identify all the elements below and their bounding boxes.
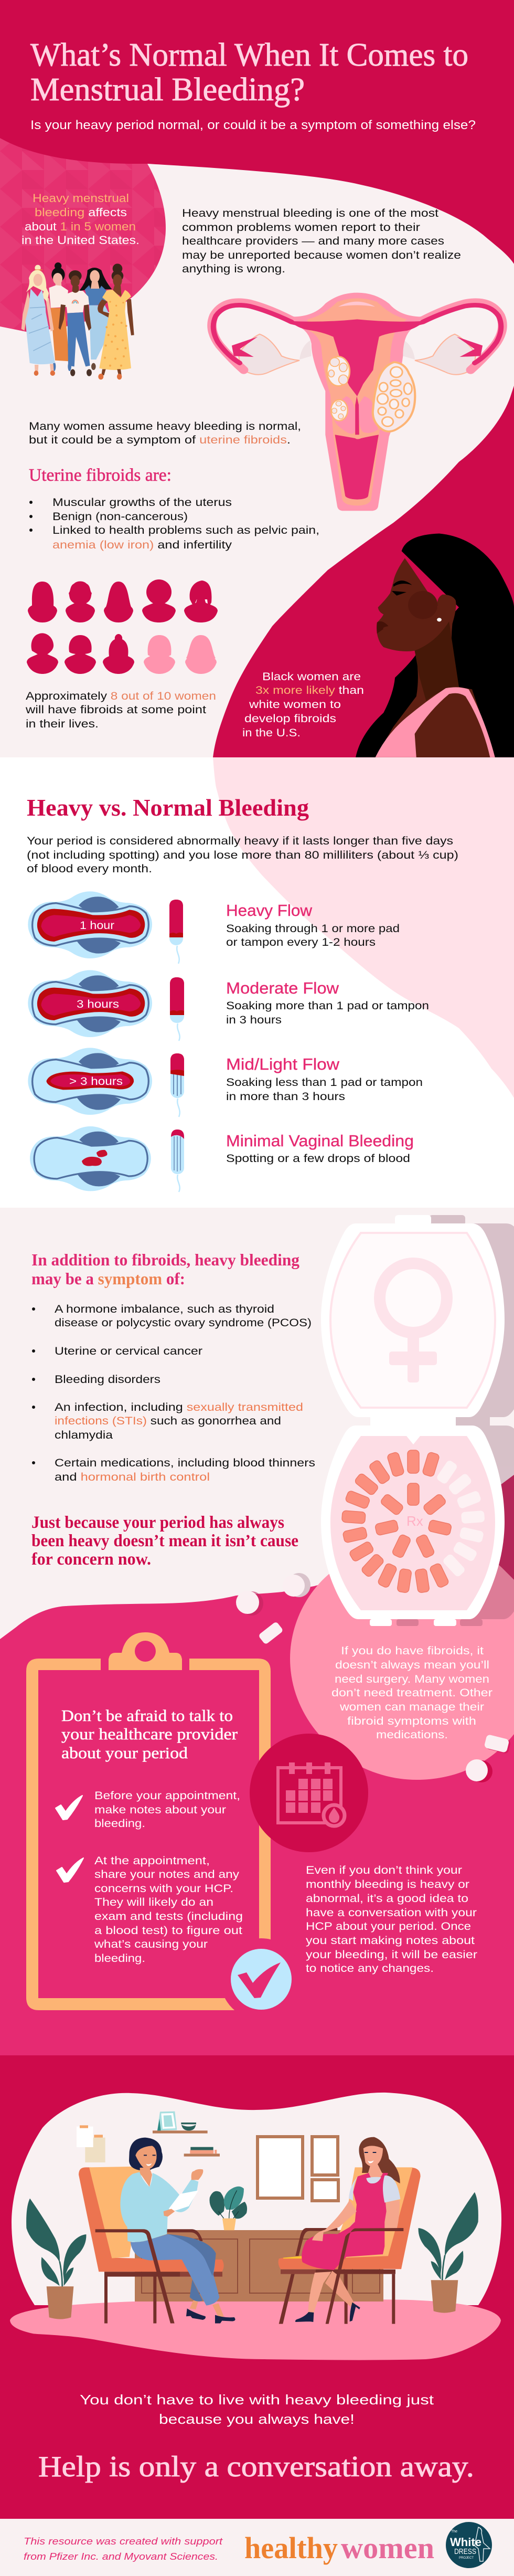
text block: heavy bleeding may be fibroids: Many women assume heavy bleeding is normal,	[29, 420, 301, 432]
flow text: moderate flow: in 3 hours	[226, 1014, 282, 1026]
flow text: moderate flow	[226, 979, 429, 1026]
text block: heavy bleeding is common	[182, 207, 461, 275]
text: you don't have to live with heavy bleeding	[80, 2392, 434, 2427]
woman with black bun behind	[49, 262, 71, 371]
illustration: Black woman in profile	[356, 534, 514, 757]
heading: talk to your provider: Don’t be afraid to talk to	[61, 1706, 233, 1725]
blonde woman in blue dress	[22, 265, 55, 376]
inner ring orange pills	[374, 1483, 452, 1559]
logo: The White Dress Project: The	[451, 2530, 457, 2533]
text block: heavy bleeding may be fibroids	[29, 420, 301, 446]
small potted plant	[209, 2187, 247, 2230]
logo: healthywomen	[244, 2531, 434, 2565]
fallopian tubes	[212, 302, 502, 370]
case shadow	[355, 1215, 514, 1626]
text: fibroids do not always mean surgery: don’t need treatment. Other	[331, 1687, 492, 1699]
flow text: minimal vaginal bleeding	[226, 1132, 414, 1165]
title: Menstrual Bleeding?	[30, 72, 305, 108]
label: more than 3 hours: > 3 hours	[69, 1075, 123, 1088]
silhouette 10	[185, 635, 217, 674]
list: uterine fibroid facts: anemia (low iron) and infertility	[52, 539, 232, 551]
silhouette 9	[144, 635, 175, 674]
icon: blue check badge	[220, 1938, 302, 2020]
panel: clipboard	[26, 1632, 271, 2010]
silhouette 1	[28, 582, 57, 622]
closing headline: Help is only a conversation away.	[38, 2451, 474, 2483]
text: fibroids do not always mean surgery: medications.	[376, 1729, 448, 1741]
ovaries	[239, 334, 476, 375]
flow text: mid light flow: Mid/Light Flow	[226, 1055, 340, 1073]
logo: healthywomen: women	[341, 2531, 434, 2565]
list item: at the appointment: what’s causing your	[94, 1938, 208, 1950]
silhouette 2	[66, 582, 95, 622]
list: other causes of heavy bleeding: and hormonal birth control	[55, 1471, 210, 1483]
list item: at the appointment: bleeding.	[94, 1952, 145, 1965]
list: other causes of heavy bleeding: disease or polycystic ovary syndrome (PCOS)	[55, 1317, 312, 1329]
text: conversation with your HCP: monthly bleeding is heavy or	[306, 1878, 469, 1891]
flow text: moderate flow: Moderate Flow	[226, 979, 339, 997]
text block: heavy bleeding is common: Heavy menstrual bleeding is one of the most	[182, 207, 438, 219]
section: talk to provider background	[0, 1475, 514, 2055]
stat text: 3x more likely: develop fibroids	[244, 713, 336, 725]
text block: heavy period definition: of blood every month.	[27, 863, 152, 875]
list: other causes of heavy bleeding: An infection, including sexually transmitted	[55, 1401, 303, 1413]
callout: always been heavy: been heavy doesn’t mean it isn’t cause	[31, 1532, 298, 1550]
right plant	[419, 2192, 478, 2313]
heading: heavy vs normal bleeding: Heavy vs. Normal Bleeding	[27, 794, 309, 821]
list item: before appointment: bleeding.	[94, 1818, 145, 1830]
title	[30, 37, 468, 108]
text: conversation with your HCP: have a conversation with your	[306, 1907, 477, 1919]
text block: heavy period definition: (not including spotting) and you lose more than 80 milliliters (about ⅓ cup)	[27, 849, 458, 861]
footer: sponsor note: from Pfizer Inc. and Myovant Sciences.	[24, 2551, 218, 2562]
list item: at the appointment: share your notes and any	[94, 1868, 240, 1881]
left plant	[26, 2199, 86, 2319]
text: fibroids do not always mean surgery: need surgery. Many women	[335, 1673, 489, 1685]
uterine cavity	[290, 319, 425, 396]
stat text: 3x more likely: 3x more likely than	[255, 684, 364, 696]
upper shelf	[153, 2112, 208, 2134]
icon: scattered pills left	[236, 1573, 310, 1645]
text block: heavy bleeding is common: healthcare providers — and many more cases	[182, 235, 444, 247]
wall frames	[258, 2137, 338, 2201]
text: fibroids do not always mean surgery: doesn’t always mean you’ll	[335, 1659, 489, 1671]
stat text: 1 in 5 women: Heavy menstrual	[33, 192, 129, 205]
logo: The White Dress Project: DRESS	[454, 2547, 476, 2556]
list: uterine fibroid facts: Linked to health problems such as pelvic pain,	[52, 524, 319, 536]
uterus body	[290, 293, 425, 511]
list item: before appointment: Before your appointment,	[94, 1790, 240, 1802]
patient	[295, 2137, 400, 2322]
flow text: heavy flow	[226, 901, 400, 948]
flow text: mid light flow	[226, 1055, 423, 1103]
list: other causes of heavy bleeding: Bleeding disorders	[55, 1374, 160, 1386]
list: other causes of heavy bleeding: A hormone imbalance, such as thyroid	[55, 1303, 274, 1315]
footer: sponsor note	[24, 2536, 223, 2562]
silhouette 5	[184, 580, 218, 622]
silhouette 3	[104, 582, 133, 622]
woman in yellow dress	[98, 263, 134, 379]
heading: other symptoms	[31, 1250, 299, 1288]
silhouette 7	[65, 635, 96, 674]
chair left	[79, 2167, 224, 2324]
cabinet	[135, 2230, 383, 2301]
logo: The White Dress Project	[446, 2522, 492, 2568]
stat text: 1 in 5 women	[22, 192, 140, 247]
flow text: mid light flow: Soaking less than 1 pad or tampon	[226, 1076, 423, 1089]
callout: always been heavy	[31, 1513, 298, 1569]
label: 1 hour: 1 hour	[80, 920, 114, 932]
list item: at the appointment: They will likely do an	[94, 1896, 213, 1908]
doctor	[120, 2138, 235, 2324]
list item: before appointment	[94, 1790, 240, 1830]
heading: talk to your provider: your healthcare provider	[61, 1725, 238, 1743]
stat text: 1 in 5 women: bleeding affects	[35, 206, 127, 219]
tampon: moderate flow	[170, 977, 184, 1041]
flow text: heavy flow: Heavy Flow	[226, 901, 313, 920]
footer: sponsor note: This resource was created with support	[24, 2536, 223, 2547]
list: uterine fibroid facts	[29, 497, 319, 551]
stat text: 3x more likely: Black women are	[262, 671, 361, 683]
text: conversation with your HCP: HCP about your period. Once	[306, 1920, 471, 1933]
stat text: 8 out of 10 women: Approximately 8 out of 10 women	[26, 690, 216, 702]
text block: heavy bleeding is common: common problems women report to their	[182, 221, 420, 234]
text: fibroids do not always mean surgery	[331, 1645, 492, 1741]
flow text: moderate flow: Soaking more than 1 pad or tampon	[226, 1000, 429, 1012]
logo: The White Dress Project: White	[450, 2536, 481, 2549]
list: other causes of heavy bleeding: chlamydia	[55, 1429, 113, 1441]
illustration: birth control pill case	[321, 1215, 514, 1626]
heading: uterine fibroids are: Uterine fibroids are:	[29, 466, 172, 485]
text: you don't have to live with heavy bleeding: You don’t have to live with heavy bleeding just	[80, 2392, 434, 2408]
list item: before appointment: make notes about your	[94, 1804, 226, 1816]
stat text: 8 out of 10 women: in their lives.	[26, 718, 99, 730]
vaginal canal	[335, 435, 379, 500]
logo: The White Dress Project: PROJECT	[459, 2557, 474, 2560]
case shell	[321, 1215, 505, 1626]
icon: calendar with blood drop	[250, 1734, 368, 1852]
illustration: doctor conversation scene	[10, 2093, 501, 2360]
list item: at the appointment: a blood test) to figure out	[94, 1925, 242, 1937]
stat text: 3x more likely: white women to	[249, 699, 341, 711]
flow text: minimal vaginal bleeding: Minimal Vaginal Bleeding	[226, 1132, 414, 1150]
lower shelf	[184, 2147, 220, 2157]
flow text: heavy flow: Soaking through 1 or more pad	[226, 923, 400, 935]
list: uterine fibroid facts: Benign (non-cancerous)	[52, 511, 188, 523]
text block: heavy period definition: Your period is considered abnormally heavy if it lasts longer than five days	[27, 835, 453, 847]
fibroid large	[373, 362, 415, 431]
callout: always been heavy: Just because your period has always	[31, 1513, 284, 1532]
list: other causes of heavy bleeding: Certain medications, including blood thinners	[55, 1457, 315, 1469]
stat text: 1 in 5 women: in the United States.	[22, 234, 140, 247]
silhouette 6	[27, 633, 58, 674]
pad: minimal bleeding	[30, 1126, 151, 1191]
notes on wall	[77, 2125, 105, 2162]
callout: always been heavy: for concern now.	[31, 1550, 151, 1569]
pad: heavy flow	[28, 891, 152, 958]
title: What’s Normal When It Comes to	[30, 37, 468, 73]
section: heavy vs normal background	[0, 757, 514, 1208]
heading: talk to your provider	[61, 1706, 238, 1762]
flow text: minimal vaginal bleeding: Spotting or a few drops of blood	[226, 1153, 410, 1165]
icon: scattered pills right	[466, 1734, 511, 1782]
left half of scene: notes, shelves, plant, chair, doctor	[77, 2112, 247, 2324]
stat text: 3x more likely	[242, 671, 364, 739]
cervix lobes	[334, 396, 355, 434]
text block: heavy period definition	[27, 835, 458, 875]
stat text: 1 in 5 women: about 1 in 5 women	[25, 220, 136, 233]
text block: heavy bleeding is common: may be unreported because women don’t realize	[182, 249, 461, 261]
list item: at the appointment	[94, 1855, 243, 1965]
pad: moderate flow	[28, 970, 152, 1037]
text: conversation with your HCP: abnormal, it’s a good idea to	[306, 1893, 468, 1905]
tampon: minimal bleeding	[171, 1129, 184, 1192]
icon: check mark 1	[56, 1796, 82, 1820]
panel: 1 in 5 women blob	[0, 138, 166, 332]
chair left front frame	[95, 2229, 175, 2324]
floor	[10, 2299, 501, 2360]
text: conversation with your HCP	[306, 1864, 477, 1975]
tampon: heavy flow	[169, 900, 183, 964]
label: 3 hours: 3 hours	[77, 998, 119, 1010]
chair right front frame	[326, 2228, 403, 2324]
right half of scene: chair and patient	[279, 2137, 421, 2324]
flow text: mid light flow: in more than 3 hours	[226, 1091, 345, 1103]
section: intro background	[0, 0, 514, 757]
heading: talk to your provider: about your period	[61, 1744, 188, 1762]
stat text: 8 out of 10 women	[25, 690, 216, 730]
text: conversation with your HCP: Even if you don’t think your	[306, 1864, 462, 1876]
text: conversation with your HCP: you start making notes about	[306, 1935, 475, 1947]
text: conversation with your HCP: to notice any changes.	[306, 1962, 434, 1975]
outer ring orange pills	[342, 1450, 449, 1593]
lid with female symbol	[330, 1233, 495, 1408]
text block: heavy bleeding is common: anything is wrong.	[182, 263, 285, 275]
text: fibroids do not always mean surgery: If you do have fibroids, it	[341, 1645, 484, 1657]
woman with long black hair behind	[79, 268, 112, 370]
text: you don't have to live with heavy bleeding: because you always have!	[159, 2411, 355, 2427]
icon: check mark 2	[57, 1858, 83, 1882]
woman with rainbow tee	[59, 270, 92, 376]
fibroid small	[331, 400, 348, 421]
list: other causes of heavy bleeding: Uterine or cervical cancer	[55, 1345, 202, 1357]
heading: other symptoms: may be a symptom of:	[31, 1269, 185, 1288]
text: conversation with your HCP: your bleeding, it will be easier	[306, 1949, 477, 1961]
Rx label: Rx	[406, 1513, 423, 1529]
illustration: group of five women	[22, 262, 134, 379]
list: other causes of heavy bleeding	[32, 1303, 315, 1483]
chair right	[279, 2167, 421, 2324]
section: closing background	[0, 2055, 514, 2519]
fibroid left	[327, 356, 350, 386]
section: other symptoms background	[0, 1208, 514, 1680]
silhouette 4	[142, 579, 176, 622]
icons: 8 of 10 women silhouettes	[27, 579, 218, 674]
pad: mid light flow	[28, 1048, 152, 1115]
logo: healthywomen: healthy	[244, 2531, 338, 2565]
heading: other symptoms: In addition to fibroids, heavy bleeding	[31, 1250, 299, 1269]
list: uterine fibroid facts: Muscular growths of the uterus	[52, 497, 232, 509]
outer ring white pills	[436, 1459, 485, 1578]
text: fibroids do not always mean surgery: fibroid symptoms with	[347, 1715, 476, 1727]
list: other causes of heavy bleeding: infections (STIs) such as gonorrhea and	[55, 1415, 281, 1427]
illustration: uterus with fibroids	[212, 293, 502, 511]
list item: at the appointment: At the appointment,	[94, 1855, 210, 1867]
stat text: 3x more likely: in the U.S.	[242, 727, 301, 739]
list item: at the appointment: concerns with your HCP.	[94, 1883, 233, 1895]
footer background	[0, 2519, 514, 2576]
silhouette 8	[103, 634, 134, 674]
subtitle: Is your heavy period normal, or could it be a symptom of something else?	[30, 118, 476, 132]
pill tray	[330, 1436, 495, 1610]
text: fibroids do not always mean surgery: women can manage their	[339, 1701, 484, 1713]
tampon: mid light flow	[170, 1053, 184, 1117]
text block: heavy bleeding may be fibroids: but it could be a symptom of uterine fibroids .	[29, 434, 291, 446]
stat text: 8 out of 10 women: will have fibroids at some point	[25, 704, 206, 716]
room blob	[12, 2093, 501, 2305]
list item: at the appointment: exam and tests (including	[94, 1910, 243, 1923]
flow text: heavy flow: or tampon every 1-2 hours	[226, 936, 376, 948]
